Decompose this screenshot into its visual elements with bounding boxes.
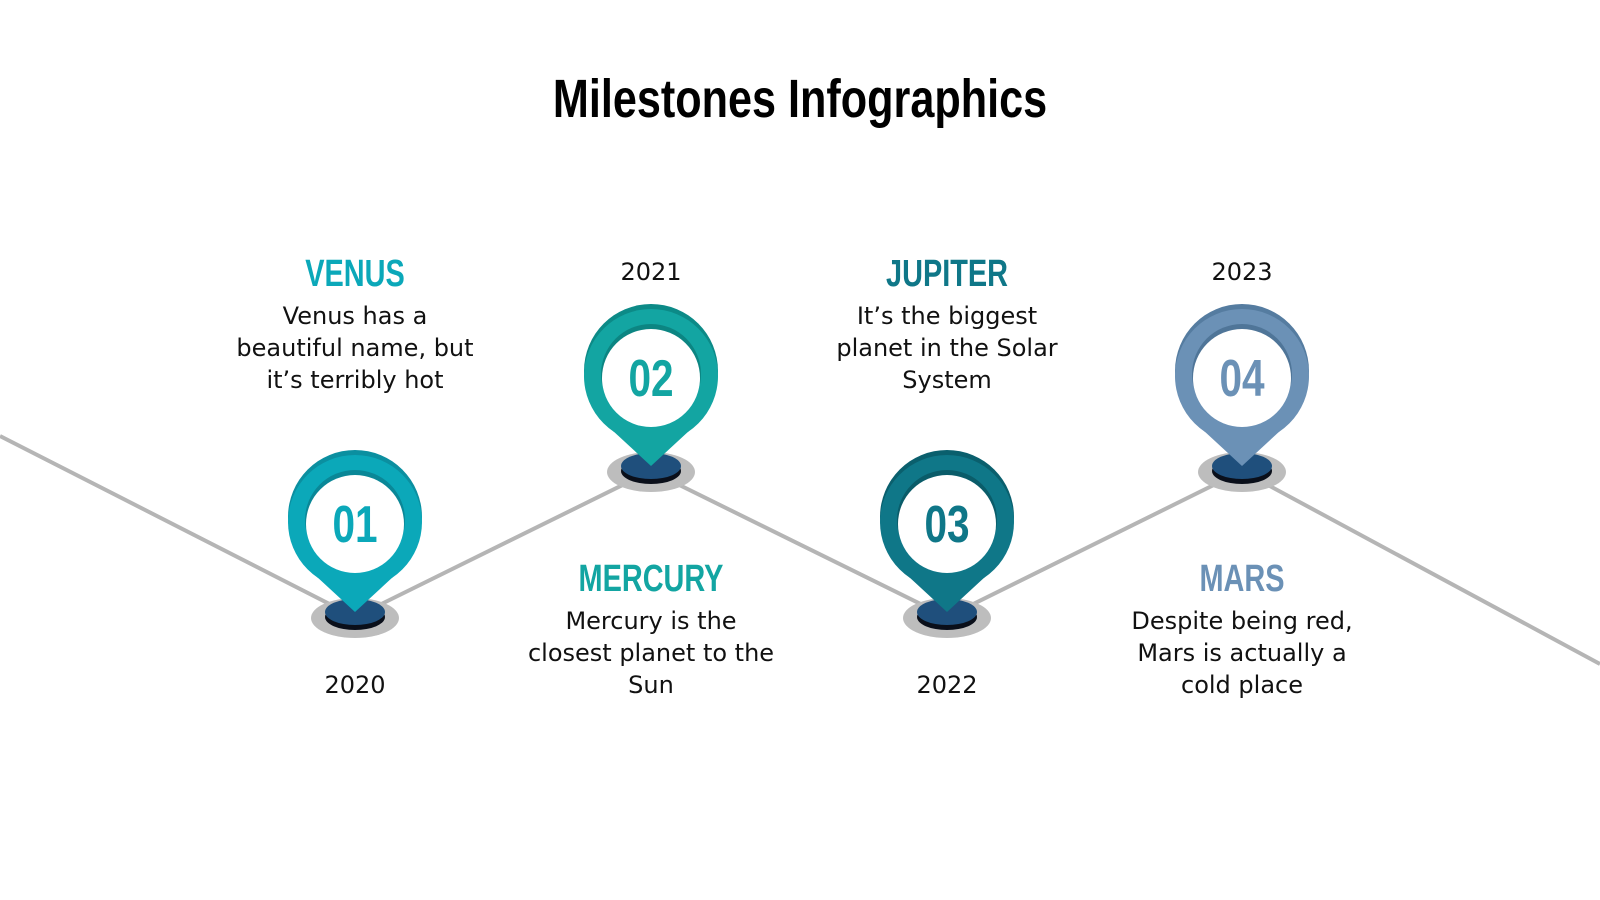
text: mercury — [528, 557, 774, 699]
text: venus: beautiful name, but — [236, 334, 474, 362]
text: jupiter — [836, 252, 1058, 394]
text: venus: Venus has a — [283, 302, 427, 330]
text: mars: Mars is actually a — [1137, 639, 1347, 667]
text: mars: Despite being red, — [1131, 607, 1353, 635]
text: mercury: MERCURY — [579, 557, 723, 600]
text: venus: VENUS — [305, 252, 405, 295]
year 2022: 2022 — [916, 671, 978, 699]
text: mercury: Mercury is the — [565, 607, 737, 635]
pin 02: 02 — [628, 349, 674, 407]
text: venus: it’s terribly hot — [266, 366, 444, 394]
timeline zigzag line — [0, 436, 1600, 664]
pin 03 — [880, 450, 1014, 638]
pin 04 — [1175, 304, 1309, 492]
text: jupiter: It’s the biggest — [857, 302, 1037, 330]
text: jupiter: planet in the Solar — [836, 334, 1058, 362]
title: Milestones Infographics — [553, 70, 1047, 129]
pin 01 — [288, 450, 422, 638]
year 2020: 2020 — [324, 671, 386, 699]
year 2021: 2021 — [620, 258, 682, 286]
text: mars — [1131, 557, 1353, 699]
year 2023: 2023 — [1211, 258, 1273, 286]
text: jupiter: System — [902, 366, 992, 394]
text: venus — [236, 252, 474, 394]
text: mercury: closest planet to the — [528, 639, 774, 667]
text: mercury: Sun — [628, 671, 674, 699]
pin 03: 03 — [924, 495, 970, 553]
pin 01: 01 — [332, 495, 378, 553]
text: mars: cold place — [1181, 671, 1303, 699]
pin 04: 04 — [1219, 349, 1265, 407]
pin 02 — [584, 304, 718, 492]
text: mars: MARS — [1200, 557, 1284, 600]
text: jupiter: JUPITER — [886, 252, 1008, 295]
